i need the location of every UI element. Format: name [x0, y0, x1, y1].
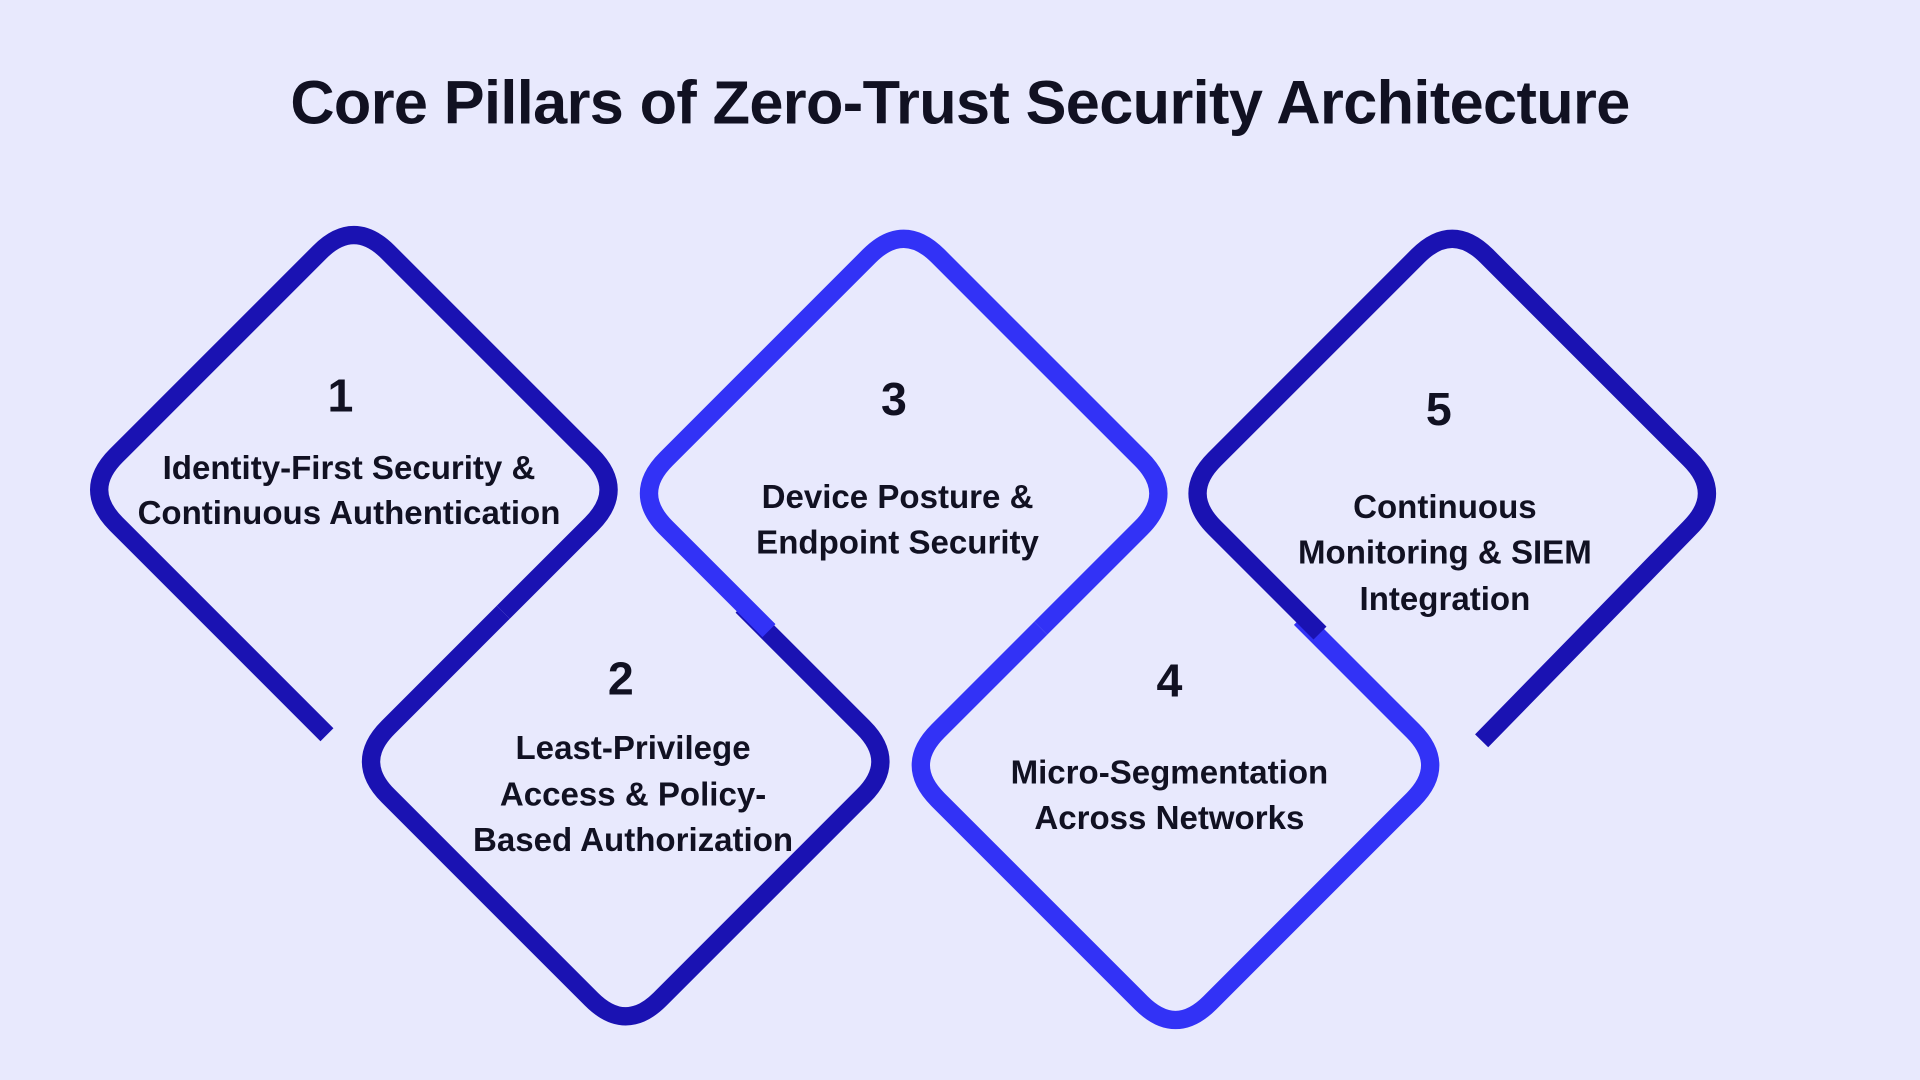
- pillar 1 text: [138, 369, 560, 532]
- pillar 3 text: [756, 373, 1040, 561]
- pillar 3 text: Device Posture &: [762, 479, 1033, 516]
- pillar 4 text: Across Networks: [1034, 800, 1304, 837]
- pillar 5 text: Integration: [1360, 581, 1530, 618]
- pillar 5 text: 5: [1426, 383, 1452, 435]
- pillar 4 text: Micro-Segmentation: [1011, 755, 1328, 792]
- pillar 1 text: Identity-First Security &: [163, 450, 535, 487]
- pillar 4 text: 4: [1156, 655, 1182, 707]
- diamond 3: [649, 239, 1158, 631]
- pillar 3 text: Endpoint Security: [756, 524, 1040, 561]
- pillar 1 text: Continuous Authentication: [138, 495, 560, 532]
- pillar 5 text: Continuous: [1353, 489, 1537, 526]
- diamond 5: [1198, 239, 1707, 741]
- pillar 5 text: [1298, 383, 1592, 618]
- pillar 5 text: Monitoring & SIEM: [1298, 534, 1592, 571]
- pillar 2 text: Least-Privilege: [516, 730, 751, 767]
- pillar 4 text: [1011, 655, 1328, 837]
- pillar 1 text: 1: [327, 369, 353, 421]
- title: Core Pillars of Zero-Trust Security Architecture: [290, 69, 1630, 137]
- pillar 2 text: Access & Policy-: [500, 777, 766, 814]
- diamond 4: [921, 618, 1430, 1020]
- pillar 2 text: 2: [608, 652, 634, 704]
- diamond 2: [371, 606, 880, 1016]
- pillar 2 text: [473, 652, 793, 859]
- diamond 1: [99, 235, 609, 735]
- pillar 2 text: Based Authorization: [473, 822, 793, 859]
- pillar 3 text: 3: [881, 373, 907, 425]
